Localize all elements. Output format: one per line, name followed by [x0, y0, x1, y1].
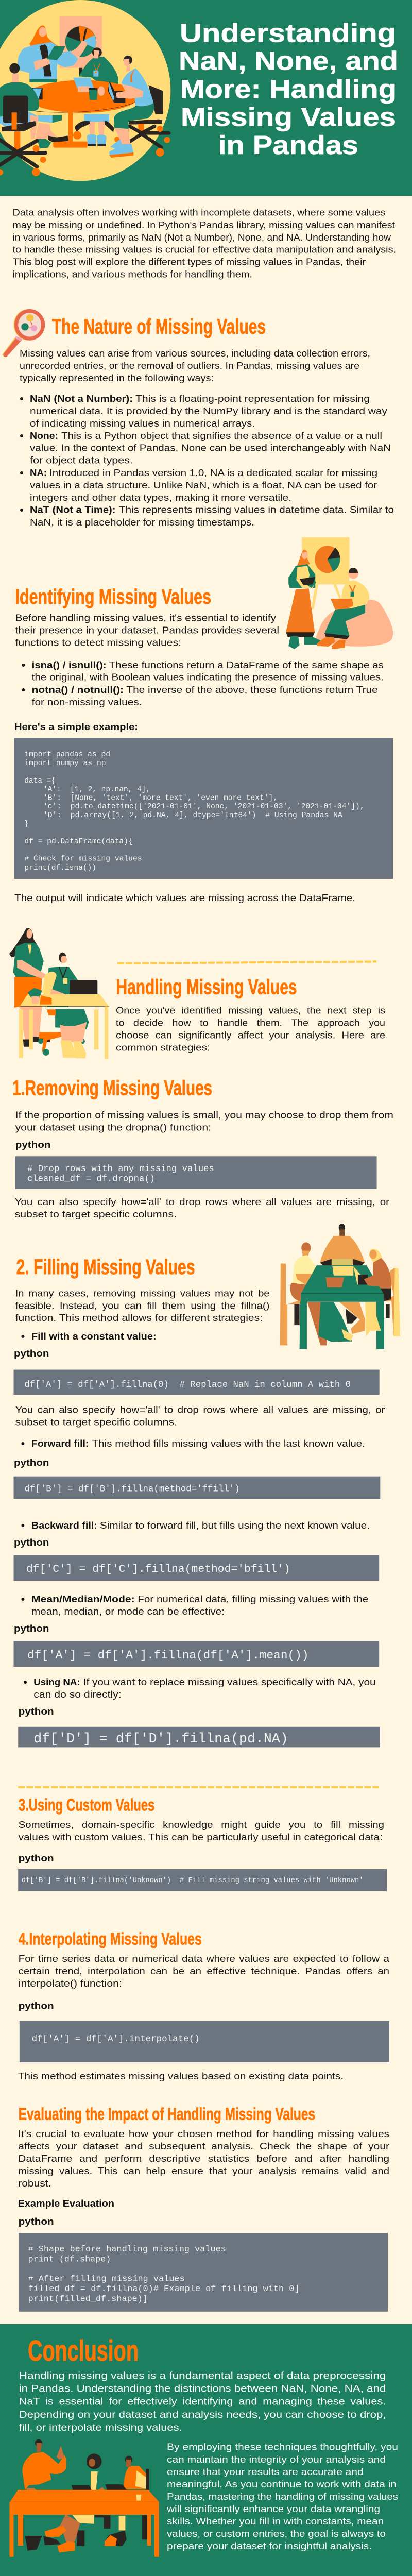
paragraph: fill, or interpolate missing values. [19, 2422, 182, 2433]
paragraph [19, 2371, 386, 2433]
bullet: using NA: If you want to replace missing values specifically with NA, you [83, 1677, 376, 1687]
code block: backward fill [13, 1555, 379, 1581]
code block: example: 'B': [None, 'text', 'more text', 'even more text'], [43, 794, 278, 803]
illustration: team at orange desk [9, 2439, 159, 2557]
code block: shape check: # After filling missing values [28, 2274, 185, 2284]
section: evaluating the impact [18, 2105, 389, 2312]
paragraph: in Pandas. Understanding the distinctions between NaN, None, NA, and [19, 2383, 386, 2395]
title [179, 18, 398, 160]
bullet: mean median mode: For numerical data, filling missing values with the [138, 1594, 368, 1604]
intro paragraph: implications, and various methods for handling them. [12, 269, 252, 280]
illustration: three people at green table [280, 1224, 400, 1349]
paragraph: missing values. This can help ensure that your analysis remains valid and [18, 2166, 389, 2176]
bullet list: detection functions: These functions return a DataFrame of the same shape as [109, 660, 384, 670]
section: custom values [18, 1787, 387, 1891]
code block: constant fill: df['A'] = df['A'].fillna(0) # Replace NaN in column A with 0 [24, 1380, 351, 1390]
bullet: forward fill: Forward fill: [31, 1438, 89, 1449]
paragraph: In many cases, removing missing values may not be [15, 1288, 269, 1298]
paragraph: closing: skills. Whether you fill in with constants, mean [167, 2516, 384, 2527]
paragraph: functions to detect missing values: [15, 638, 181, 648]
section: interpolation [18, 1929, 390, 2081]
code block: example [14, 738, 393, 879]
title: in Pandas [218, 130, 358, 160]
title: NaN, None, and [179, 46, 398, 76]
bullet list: types of missing values: None: [30, 431, 58, 441]
output note: The output will indicate which values are missing across the DataFrame. [14, 893, 355, 903]
paragraph: feasible. Instead, you can fill them using the fillna() [15, 1300, 269, 1311]
heading: Conclusion [28, 2334, 139, 2367]
bullet list: types of missing values: This is a Python object that signifies the absence of a value or a null [61, 431, 382, 441]
bullet: using NA: Using NA: [33, 1677, 80, 1687]
paragraph: closing: will significantly enhance your data wrangling [166, 2504, 380, 2514]
language label: python [19, 2216, 54, 2227]
paragraph: subset to target specific columns. [15, 1209, 177, 1219]
paragraph: Once you've identified missing values, the next step is [116, 1006, 385, 1016]
bullet: mean median mode: mean, median, or mode can be effective: [31, 1606, 225, 1617]
bullet list: types of missing values: NaN (Not a Number): [30, 394, 133, 404]
language label: python [14, 1537, 49, 1548]
paragraph: affects your dataset and subsequent analysis. Check the shape of your [18, 2141, 389, 2151]
illustration: two women with pie chart and beanbag [286, 537, 393, 649]
paragraph: DataFrame and perform descriptive statistics before and after handling [18, 2154, 389, 2164]
paragraph [15, 613, 279, 648]
paragraph [15, 1404, 385, 1427]
bullet list: types of missing values: numerical data. It is provided by the NumPy library and is the standard way [30, 406, 387, 416]
paragraph: subset to target specific columns. [15, 1417, 177, 1427]
bullet list: detection functions: notna() / notnull(): [32, 685, 124, 695]
bullet list: types of missing values: values in a data structure. Unlike NaN, which is a float, NA can be used for [30, 480, 377, 490]
paragraph: to decide how to handle them. The approach you [116, 1018, 385, 1028]
example label: Here's a simple example: [14, 722, 138, 732]
paragraph: closing: meaningful. As you continue to work with data in [167, 2479, 397, 2489]
intro paragraph: may be missing or undefined. In Python's Pandas library, missing values can manifest [12, 220, 395, 230]
title: Understanding [180, 18, 396, 47]
code block: mean fill: df['A'] = df['A'].fillna(df['A'].mean()) [27, 1649, 309, 1662]
bullet list: types of missing values [20, 394, 394, 528]
woman in green hoodie [79, 47, 118, 93]
paragraph [15, 1110, 393, 1132]
code block: shape check: # Shape before handling missing values [28, 2245, 226, 2255]
bullet: mean median mode [21, 1594, 368, 1617]
code block: interpolate: df['A'] = df['A'].interpolate() [32, 2034, 200, 2044]
paragraph: Before handling missing values, it's essential to identify [15, 613, 276, 623]
illustration: women at desk with monitor [9, 928, 109, 1059]
heading: 1.Removing Missing Values [12, 1076, 212, 1100]
illustration: team meeting around table [0, 0, 170, 181]
paragraph: closing: values, or custom entries, the goal is always to [167, 2529, 386, 2539]
title: More: Handling [180, 74, 397, 104]
bullet list: types of missing values: integers and other data types, making it more versatile. [30, 493, 291, 503]
paragraph: interpolate() function: [19, 1978, 122, 1989]
paragraph: It's crucial to evaluate how your chosen method for handling missing values [18, 2129, 389, 2139]
language label: python [19, 2001, 54, 2011]
paragraph: closing: ensure that your results are accurate and [167, 2467, 364, 2477]
code block: interpolate [20, 2021, 389, 2062]
code block: example: 'A': [1, 2, np.nan, 4], [43, 786, 150, 794]
paragraph: closing: By employing these techniques thoughtfully, you [167, 2442, 398, 2452]
bullet: backward fill: Similar to forward fill, but fills using the next known value. [100, 1520, 370, 1531]
code block: dropna: cleaned_df = df.dropna() [27, 1175, 155, 1184]
paragraph [116, 1006, 385, 1053]
code block: constant fill [13, 1370, 380, 1395]
bullet: constant value: Fill with a constant value: [31, 1331, 157, 1342]
bullet list: detection functions: for non-missing values. [32, 697, 142, 707]
intro paragraph: This blog post will explore the different types of missing values in Pandas, their [12, 257, 366, 267]
paragraph [20, 348, 370, 383]
example label: Example Evaluation [18, 2198, 114, 2209]
language label: python [14, 1623, 49, 1634]
paragraph: closing: prepare your dataset for insightful analysis. [167, 2541, 372, 2551]
round table [26, 80, 139, 148]
woman with tablet [18, 25, 88, 82]
bullet: backward fill: Backward fill: [31, 1520, 97, 1531]
heading: Identifying Missing Values [15, 585, 211, 608]
code block: shape check [19, 2233, 388, 2312]
paragraph: unrecorded entries, or the removal of outliers. In Pandas, missing values are [20, 361, 359, 371]
tablet, mug and laptop on table [32, 78, 125, 103]
paragraph: Depending on your dataset and analysis needs, you can choose to drop, [19, 2410, 386, 2420]
intro paragraph: in various forms, primarily as NaN (Not a Number), None, and NA. Understanding how [12, 232, 391, 243]
code block: forward fill: df['B'] = df['B'].fillna(method='ffill') [24, 1485, 240, 1495]
code block: custom fill: df['B'] = df['B'].fillna('Unknown') # Fill missing string values with 'Unknown' [22, 1876, 364, 1885]
code block: example: 'c': pd.to_datetime(['2021-01-01', None, '2021-01-03', '2021-01-04']), [43, 803, 365, 811]
language label: python [19, 1706, 54, 1717]
paragraph [18, 2129, 389, 2189]
bullet list: types of missing values: NA: [30, 468, 47, 478]
paragraph: their presence in your dataset. Pandas provides several [15, 625, 279, 636]
paragraph: robust. [18, 2178, 52, 2189]
paragraph: Sometimes, domain-specific knowledge might guide you to fill missing [19, 1820, 384, 1830]
paragraph: function. This method allows for different strategies: [15, 1313, 263, 1323]
code block: mean fill [13, 1641, 379, 1667]
paragraph [15, 1288, 269, 1323]
bullet: mean median mode: Mean/Median/Mode: [31, 1594, 135, 1604]
section: identifying missing values [14, 537, 393, 903]
paragraph [19, 1820, 384, 1842]
bullet list: types of missing values: of indicating missing values in numerical arrays. [30, 418, 255, 429]
heading: The Nature of Missing Values [52, 314, 266, 338]
paragraph: certain trend, interpolation can be an effective technique. Pandas offers an [19, 1966, 389, 1976]
man from behind on chair [0, 63, 46, 176]
bullet list: types of missing values: This represents missing values in datetime data. Similar to [119, 505, 394, 515]
bullet list: types of missing values: value. In the context of Pandas, None can be used interchangeably with NaN [30, 443, 391, 453]
bullet list: types of missing values: NaN, it is a placeholder for missing timestamps. [30, 517, 254, 528]
code block: dropna [15, 1156, 377, 1189]
paragraph: Missing values can arise from various sources, including data collection errors, [20, 348, 370, 359]
code block: example: 'D': pd.array([1, 2, pd.NA, 4], dtype='Int64') # Using Pandas NA [43, 811, 342, 820]
language label: python [19, 1853, 54, 1863]
heading: 4.Interpolating Missing Values [19, 1929, 202, 1948]
paragraph: You can also specify how='all' to drop rows where all values are missing, or [15, 1404, 385, 1415]
paragraph: typically represented in the following ways: [20, 373, 214, 383]
language label: python [14, 1348, 49, 1359]
paragraph: closing: can maintain the integrity of your analysis and [167, 2454, 386, 2465]
title: Missing Values [181, 103, 396, 132]
code block: example: # Check for missing values [24, 855, 142, 863]
code block: shape check: print (df.shape) [28, 2255, 111, 2264]
paragraph: your dataset using the dropna() function: [15, 1122, 211, 1132]
decorative heading rule [117, 961, 376, 963]
section: nature of missing values [2, 309, 394, 528]
intro paragraph: Data analysis often involves working with incomplete datasets, where some values [12, 208, 385, 218]
bullet: backward fill [21, 1520, 370, 1531]
language label: python [15, 1140, 51, 1150]
bullet list: detection functions: The inverse of the above, these functions return True [126, 685, 378, 695]
code block: forward fill [13, 1477, 380, 1499]
code block: pd.NA fill: df['D'] = df['D'].fillna(pd.NA) [33, 1731, 288, 1747]
paragraph: values with custom values. This can be particularly useful in categorical data: [19, 1832, 383, 1842]
heading: 3.Using Custom Values [19, 1795, 154, 1814]
code block: example: } [24, 820, 28, 828]
paragraph: Handling missing values is a fundamental aspect of data preprocessing [19, 2371, 386, 2381]
bullet list: types of missing values: This is a floating-point representation for missing [135, 394, 370, 404]
header banner [0, 0, 412, 196]
bullet: forward fill [21, 1438, 365, 1449]
bullet list: types of missing values: NaT (Not a Time): [30, 505, 115, 515]
bullet: using NA [24, 1677, 376, 1700]
bullet list: types of missing values: for object data types. [30, 455, 133, 466]
code block: backward fill: df['C'] = df['C'].fillna(method='bfill') [26, 1563, 290, 1575]
code block: example: import numpy as np [24, 759, 106, 768]
legs under table [35, 114, 114, 148]
code block: custom fill [18, 1869, 387, 1891]
code block: pd.NA fill [18, 1727, 380, 1747]
bullet list: detection functions [22, 660, 384, 707]
paragraph: closing: Pandas, mastering the handling of missing values [167, 2492, 398, 2502]
paragraph: choose can significantly affect your analysis. Here are [116, 1030, 385, 1040]
icon: magnifying glass [2, 309, 45, 357]
heading: Evaluating the Impact of Handling Missing Values [19, 2105, 315, 2124]
paragraph: closing [166, 2442, 398, 2551]
bullet list: types of missing values: Introduced in Pandas version 1.0, NA is a dedicated scalar for missing [49, 468, 377, 478]
bullet: using NA: can do so directly: [33, 1689, 122, 1700]
code block: example: data ={ [24, 777, 56, 785]
intro paragraph [12, 208, 396, 280]
panel: conclusion [0, 2324, 412, 2576]
code block: example: print(df.isna()) [24, 864, 96, 872]
code block: dropna: # Drop rows with any missing values [27, 1164, 214, 1174]
language label: python [14, 1458, 49, 1468]
method note: This method estimates missing values based on existing data points. [18, 2071, 344, 2081]
paragraph: NaT is essential for effectively identifying and managing these values. [19, 2397, 386, 2407]
paragraph: For time series data or numerical data where values are expected to follow a [19, 1954, 390, 1964]
code block: shape check: print(filled_df.shape)] [28, 2294, 148, 2304]
bullet: forward fill: This method fills missing values with the last known value. [92, 1438, 365, 1449]
section: handling missing values [9, 928, 385, 1059]
bullet list: detection functions: the original, with Boolean values indicating the presence of missing values. [32, 672, 384, 683]
intro paragraph: to handle these missing values is crucial for effective data manipulation and analysis. [12, 245, 396, 255]
heading: 2. Filling Missing Values [16, 1255, 195, 1279]
bullet list: detection functions: isna() / isnull(): [32, 660, 107, 670]
code block: shape check: filled_df = df.fillna(0)# Example of filling with 0] [28, 2284, 300, 2294]
heading: Handling Missing Values [116, 975, 297, 998]
code block: example: import pandas as pd [24, 751, 110, 759]
paragraph: If the proportion of missing values is small, you may choose to drop them from [15, 1110, 393, 1120]
paragraph: common strategies: [116, 1042, 210, 1053]
paragraph [15, 1197, 389, 1219]
section: removing missing values [12, 1076, 393, 1219]
section: filling missing values [13, 1224, 400, 1747]
paragraph: You can also specify how='all' to drop rows where all values are missing, or [15, 1197, 389, 1207]
man in blue shirt on chair [109, 56, 170, 158]
code block: example: df = pd.DataFrame(data){ [24, 838, 133, 846]
paragraph [19, 1954, 390, 1989]
